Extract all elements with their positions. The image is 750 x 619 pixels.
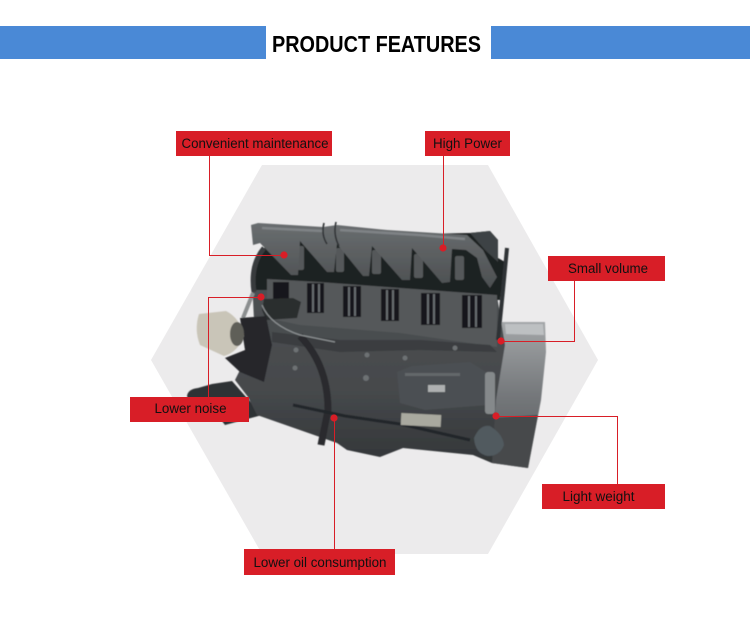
nameplate [401,413,441,427]
callout: Lower oil consumption [244,414,395,575]
manifold top highlight [262,228,465,239]
rocker cover right end [470,231,498,262]
starter highlight [405,373,460,376]
callout: Lower noise [130,293,265,422]
engine block silhouette [235,280,505,463]
dipstick right [498,248,507,340]
title: PRODUCT FEATURES [272,31,481,57]
side plate [267,279,497,347]
callout: Convenient maintenance [176,131,332,259]
header band left [0,26,266,59]
starter motor [397,362,488,410]
engine foot [187,381,262,425]
exhaust port flanges [295,246,464,280]
bolts [292,346,458,381]
engine illustration [187,222,546,468]
fan housing and head [252,231,505,300]
callout: Lower oil consumption: Lower oil consumption [254,555,386,570]
filler cap [474,426,504,456]
callout: Light weight [492,412,665,509]
oil hose [300,336,328,445]
injection ridge [272,332,497,352]
callout: High Power [425,131,510,252]
starter ring [485,372,495,414]
housing lower plate [490,415,538,468]
housing top highlight [505,324,544,335]
callout: Lower noise: Lower noise [154,401,226,416]
silver pipe [243,293,253,318]
manifold coupling [323,222,339,246]
exhaust manifold [251,223,497,288]
plate slots [273,282,482,328]
callout: Convenient maintenance: Convenient maintenance [182,136,328,151]
callout: Small volume [497,256,665,345]
oil rail [293,405,470,440]
header band right [491,26,750,59]
starter label [428,385,445,392]
alternator face [230,322,244,346]
callout: High Power: High Power [433,136,502,151]
callout: Light weight: Light weight [562,489,635,504]
callout: Small volume: Small volume [568,261,648,276]
hexagon background [151,165,598,554]
alternator bracket [225,316,272,382]
thin cable [262,305,335,342]
flywheel housing [490,322,546,468]
air box [262,298,301,320]
fan housing left curve [253,248,264,292]
alternator [197,311,244,356]
plate slot bars [312,284,477,327]
